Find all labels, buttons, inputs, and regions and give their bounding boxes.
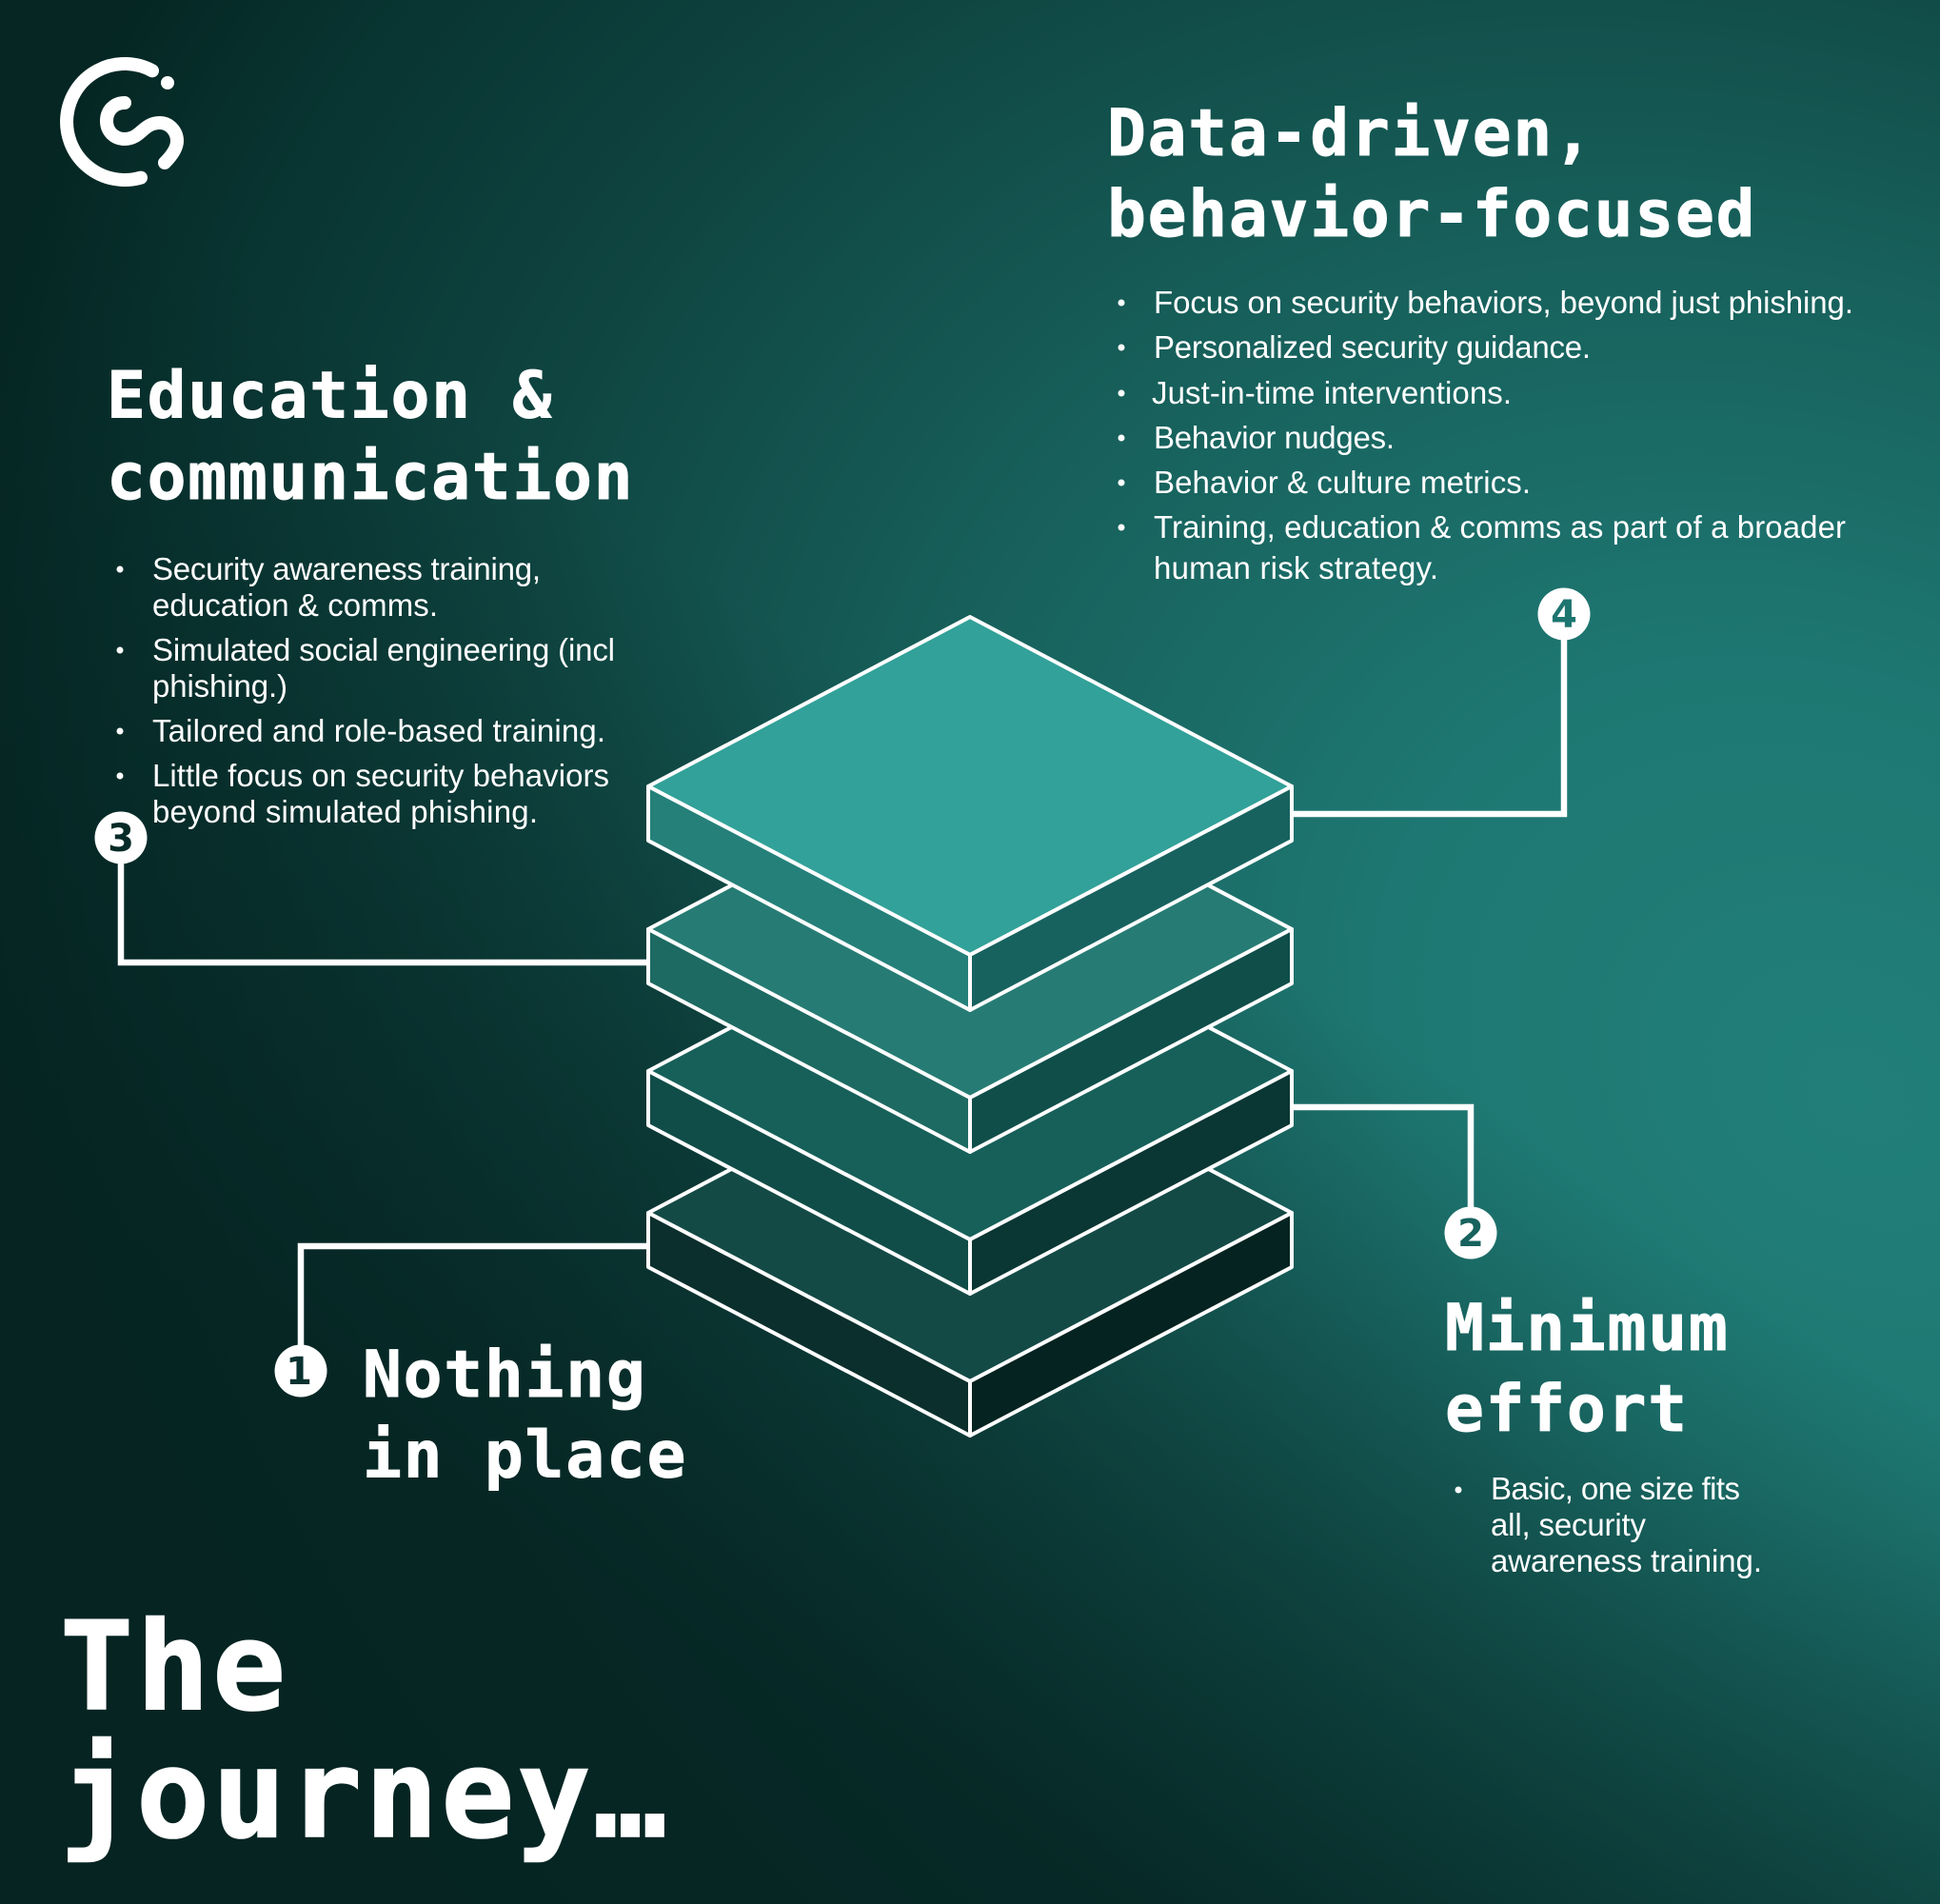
number badge 1	[274, 1344, 327, 1398]
bullet list: Little focus on security behaviors	[152, 758, 609, 793]
number badge 4	[1538, 588, 1590, 640]
layer 3	[648, 760, 1292, 1152]
heading: communication	[107, 440, 634, 515]
bullet list: beyond simulated phishing.	[152, 794, 538, 829]
layered stack diagram	[648, 617, 1292, 1436]
bullet list: Focus on security behaviors, beyond just phishing.	[1154, 285, 1853, 320]
connector: level 4	[1292, 614, 1564, 814]
heading	[1445, 1291, 1729, 1447]
number badge 3: 3	[108, 817, 134, 861]
bullet list: Personalized security guidance.	[1154, 329, 1591, 365]
heading: Data-driven,	[1107, 96, 1594, 171]
bullet list: awareness training.	[1491, 1543, 1762, 1578]
connector: level 1	[301, 1246, 648, 1371]
heading	[107, 358, 634, 515]
panel: minimum effort	[1445, 1291, 1762, 1578]
bullet list	[1118, 285, 1853, 585]
heading: nothing in place: in place	[363, 1418, 687, 1493]
layer 2	[648, 902, 1292, 1294]
panel: data-driven, behavior-focused	[1107, 96, 1853, 585]
bullet list: Basic, one size fits	[1491, 1471, 1740, 1506]
bullet list: Just-in-time interventions.	[1152, 375, 1512, 410]
number badge 2	[1445, 1207, 1496, 1259]
bullet list	[1455, 1471, 1762, 1578]
number badge 4: 4	[1551, 593, 1577, 637]
bullet list: Tailored and role-based training.	[152, 713, 605, 748]
heading: nothing in place	[363, 1338, 687, 1493]
bullet list: all, security	[1491, 1507, 1647, 1542]
title	[60, 1597, 670, 1866]
number badge 1: 1	[286, 1350, 312, 1394]
bullet list	[116, 551, 615, 829]
number badge 3	[95, 811, 147, 864]
bullet list: phishing.)	[152, 668, 287, 704]
icon: logo	[67, 64, 177, 180]
number badge 2: 2	[1457, 1212, 1484, 1256]
heading: Minimum	[1445, 1291, 1729, 1366]
connector: level 2	[1292, 1107, 1471, 1233]
layer 1: bottom	[648, 1043, 1292, 1436]
bullet list: Behavior nudges.	[1154, 420, 1395, 455]
bullet list: Behavior & culture metrics.	[1154, 465, 1531, 500]
title: journey…	[60, 1724, 670, 1866]
heading: nothing in place: Nothing	[363, 1338, 646, 1413]
title: The	[60, 1597, 288, 1738]
bullet list: Simulated social engineering (incl	[152, 632, 615, 667]
heading: Education &	[107, 358, 553, 434]
layer 4: top	[648, 617, 1292, 1010]
bullet list: Training, education & comms as part of a broader	[1154, 509, 1846, 545]
heading: behavior-focused	[1107, 177, 1756, 252]
connector: level 3	[121, 838, 648, 962]
bullet list: human risk strategy.	[1154, 550, 1438, 585]
panel: education & communication	[107, 358, 634, 829]
heading	[1107, 96, 1756, 252]
heading: effort	[1445, 1372, 1689, 1447]
bullet list: Security awareness training,	[152, 551, 541, 586]
bullet list: education & comms.	[152, 587, 438, 623]
